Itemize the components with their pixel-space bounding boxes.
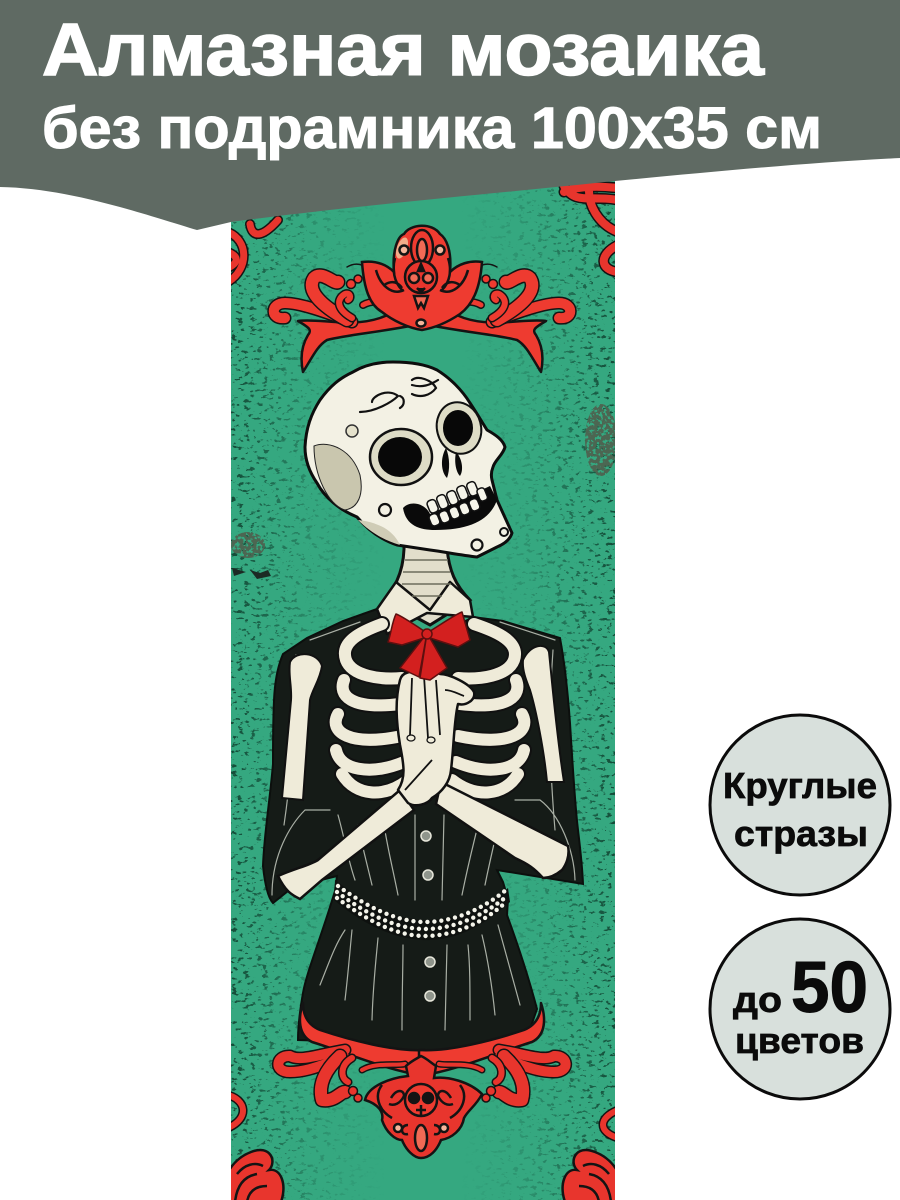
badge: round rhinestones: Круглые [723, 765, 877, 806]
header band [0, 0, 900, 230]
forehead swirls [360, 378, 438, 412]
dotted belt [334, 880, 510, 940]
praying hands [397, 670, 474, 805]
ornament: top corners [228, 182, 618, 282]
badge: round rhinestones: стразы [734, 813, 868, 854]
badge: up to 50 colours: 50 [791, 948, 868, 1028]
skeleton figure [263, 540, 583, 1058]
ornament: top red floral crest [274, 226, 570, 372]
lower flower head [365, 1056, 482, 1158]
jacket buttons [421, 831, 435, 1001]
title [42, 8, 822, 161]
jacket stripes [272, 622, 575, 1030]
jacket [263, 609, 583, 1058]
forearm bones [278, 790, 414, 899]
nose [442, 448, 462, 478]
skull [305, 362, 512, 557]
picture panel: green background with grunge texture [231, 170, 617, 1200]
badge: up to 50 colours: до [733, 979, 782, 1020]
badge: up to 50 colours: цветов [735, 1020, 864, 1061]
mouth [403, 486, 497, 530]
eye sockets [370, 429, 432, 485]
flower head [362, 226, 482, 330]
ornament: bottom corners [221, 1095, 625, 1200]
temple shading [314, 444, 361, 510]
rib cage [336, 624, 524, 792]
collar [377, 582, 473, 634]
subtitle: без подрамника 100х35 см [42, 96, 822, 161]
red bow tie [388, 612, 470, 680]
badge: round rhinestones [710, 715, 890, 895]
title: Алмазная мозаика [42, 8, 765, 91]
neck [384, 540, 470, 625]
upper arm bones [282, 654, 322, 800]
badge: up to 50 colours [710, 919, 890, 1099]
teeth [426, 481, 488, 527]
ornament: bottom red floral crest [278, 1003, 566, 1158]
